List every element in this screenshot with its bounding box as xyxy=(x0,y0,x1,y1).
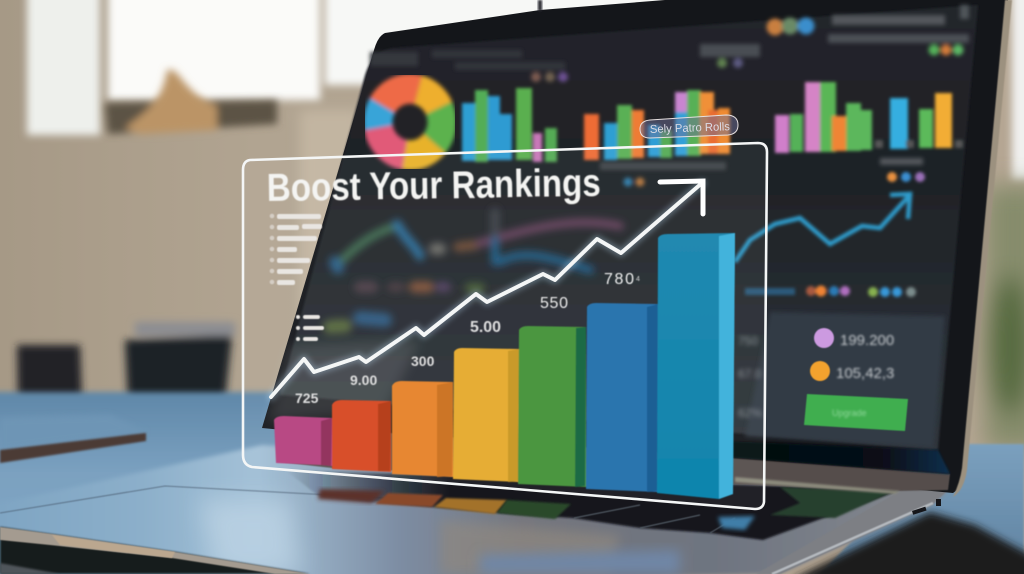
pill label on screen: Sely Patro Rolls xyxy=(650,121,730,136)
blurred bar charts on screen xyxy=(462,82,963,162)
bar 4 xyxy=(453,348,519,482)
bullet list lower xyxy=(296,315,324,341)
stats panel: 199.200 xyxy=(840,332,894,349)
bar 5 xyxy=(518,326,586,487)
value labels: 4 xyxy=(636,276,640,283)
bar 1 xyxy=(274,416,332,466)
stats panel xyxy=(738,312,945,448)
glass panel fill xyxy=(243,143,767,509)
value labels: 9.00 xyxy=(350,372,377,388)
chairs xyxy=(17,322,235,402)
value labels: 5.00 xyxy=(470,319,501,336)
value labels: 550 xyxy=(540,295,568,312)
glass panel border xyxy=(243,143,767,509)
donut chart xyxy=(378,89,442,155)
stats panel: 67.0 xyxy=(738,367,762,381)
screen dashboard headers xyxy=(370,5,969,186)
bullet list upper xyxy=(270,214,322,285)
plant right xyxy=(985,185,1024,450)
stats panel: 105,42,3 xyxy=(836,365,894,382)
pill label on screen xyxy=(640,115,738,138)
right screen dots xyxy=(745,172,925,297)
title: Boost Your Rankings xyxy=(266,162,601,210)
laptop lid xyxy=(262,0,1012,497)
stats panel: Upgrade xyxy=(832,408,867,418)
value labels: 780 xyxy=(604,271,634,288)
laptop keyboard deck xyxy=(0,445,948,574)
bar 7 xyxy=(657,233,735,499)
value labels: 725 xyxy=(295,390,319,406)
window sill and vase xyxy=(105,70,277,134)
lower screen: blurred trends behind glass xyxy=(330,212,620,327)
side strip and ports xyxy=(756,490,948,574)
front edge xyxy=(0,527,310,574)
screen xyxy=(280,5,978,450)
keyboard area xyxy=(285,470,900,540)
trend line arrow xyxy=(271,181,703,397)
hinge xyxy=(280,425,950,491)
stats panel: 750 xyxy=(738,334,758,348)
value labels: 300 xyxy=(411,353,435,369)
closed notebook on table xyxy=(0,415,146,463)
3D bar chart xyxy=(274,233,735,499)
bar 2 xyxy=(332,400,391,472)
table xyxy=(0,392,1024,574)
bar 6 xyxy=(586,303,658,492)
stats panel: 62% xyxy=(738,406,762,420)
right screen trend arrow xyxy=(735,194,910,262)
bar 3 xyxy=(392,381,453,477)
value labels xyxy=(295,271,640,406)
